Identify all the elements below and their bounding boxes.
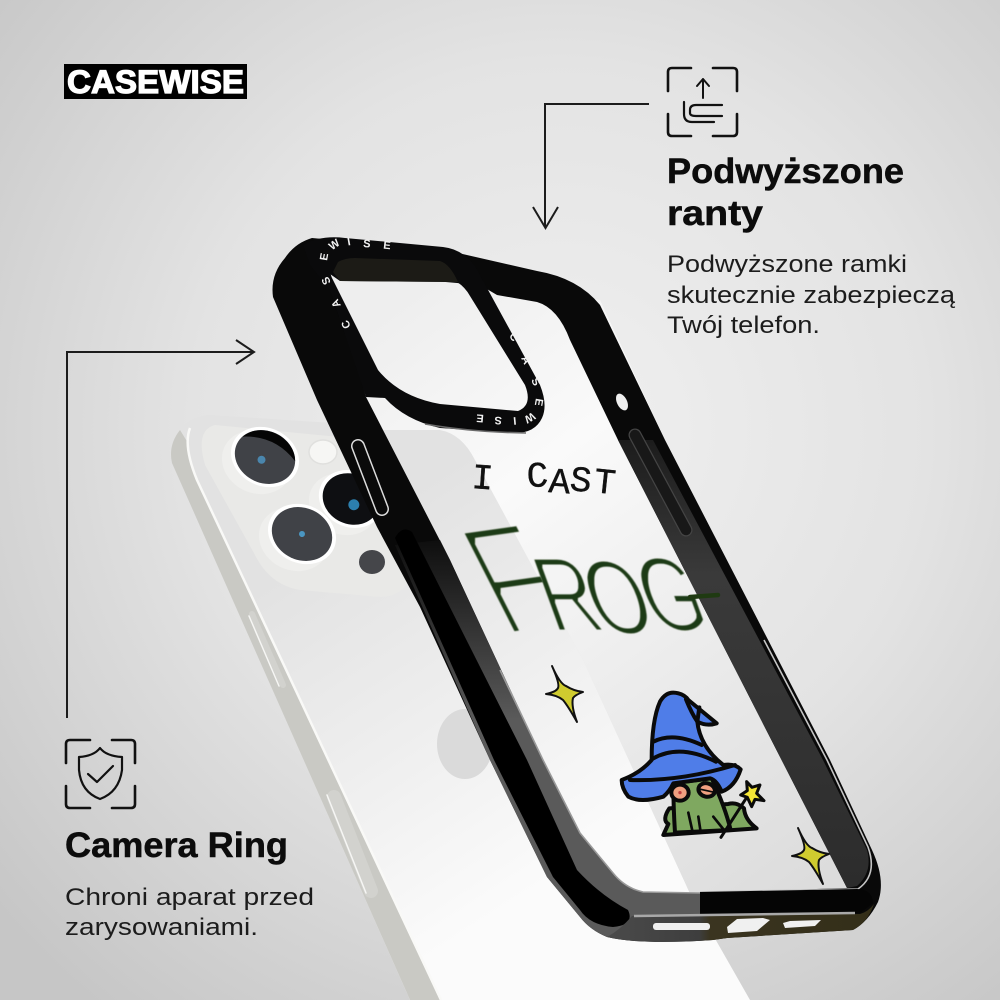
case body <box>272 238 881 942</box>
lower left black strip <box>395 530 630 927</box>
power button <box>327 795 371 893</box>
left eye <box>671 785 689 801</box>
text: camera ring description: zarysowaniami. <box>65 914 258 941</box>
frog body <box>673 778 731 833</box>
text: raised edges description: Podwyższone ramki <box>667 251 907 278</box>
G crossbar extension <box>690 595 718 597</box>
body lines <box>688 813 724 832</box>
volume button <box>249 614 283 686</box>
lidar sensor <box>359 550 385 574</box>
transparent case frame <box>272 238 881 942</box>
power button cutout <box>358 446 382 509</box>
heading: Podwyższone ranty <box>667 152 904 233</box>
view through clear case <box>320 262 860 900</box>
sparkle bottom <box>792 828 829 884</box>
arrow to camera ring <box>67 340 254 718</box>
base highlight <box>634 913 855 916</box>
icon: raised edges <box>668 68 737 136</box>
text: camera ring description: Chroni aparat przed <box>65 884 314 911</box>
camera ring <box>303 236 545 433</box>
letters ROG: ROG <box>519 536 723 657</box>
icon: shield <box>66 740 135 808</box>
sparkle top <box>546 666 583 722</box>
camera plateau <box>202 425 415 597</box>
inner edge highlight <box>500 670 700 893</box>
heading: Camera Ring: Camera Ring <box>65 826 288 865</box>
ring lettering right: CASEWISE <box>476 331 545 426</box>
text: camera ring description <box>65 884 314 941</box>
bottom edge black band <box>700 889 873 913</box>
wand star <box>741 782 764 807</box>
letter F: F <box>434 490 592 669</box>
ring body <box>303 237 545 433</box>
wand <box>721 795 748 837</box>
text: raised edges description <box>667 251 956 339</box>
phone body <box>171 415 750 1000</box>
lens right <box>299 457 393 547</box>
ring lettering left: CASEWISE <box>318 236 391 330</box>
frog wizard illustration <box>622 693 764 837</box>
bottom base <box>607 904 874 942</box>
right rim highlight <box>700 640 871 892</box>
arrow to raised edges <box>533 104 649 228</box>
volume buttons <box>635 435 686 530</box>
mute switch <box>614 392 630 412</box>
apple logo <box>437 709 493 779</box>
rim highlight <box>188 428 441 1000</box>
lens top <box>211 413 309 507</box>
artwork: FROG <box>434 490 723 669</box>
lens bottom <box>248 490 346 584</box>
right eye <box>697 781 716 799</box>
right side band <box>618 440 869 888</box>
heading: Podwyższone ranty: ranty <box>667 194 764 233</box>
speaker slots <box>653 918 821 933</box>
text: raised edges description: skutecznie zabezpieczą <box>667 282 956 309</box>
hat bands <box>630 699 735 780</box>
side rim band <box>171 430 440 1000</box>
lower left grey band <box>395 540 700 940</box>
flash <box>309 440 337 464</box>
white phone <box>171 413 750 1000</box>
artwork: I CAST: I CAST <box>470 456 618 505</box>
frog legs <box>663 803 757 835</box>
ring highlight <box>425 424 526 433</box>
wizard hat <box>622 693 741 800</box>
top rail through ring <box>333 258 458 282</box>
heading: Podwyższone ranty: Podwyższone <box>667 152 904 191</box>
logo: CASEWISE: CASEWISE <box>67 64 244 100</box>
text: raised edges description: Twój telefon. <box>667 312 820 339</box>
